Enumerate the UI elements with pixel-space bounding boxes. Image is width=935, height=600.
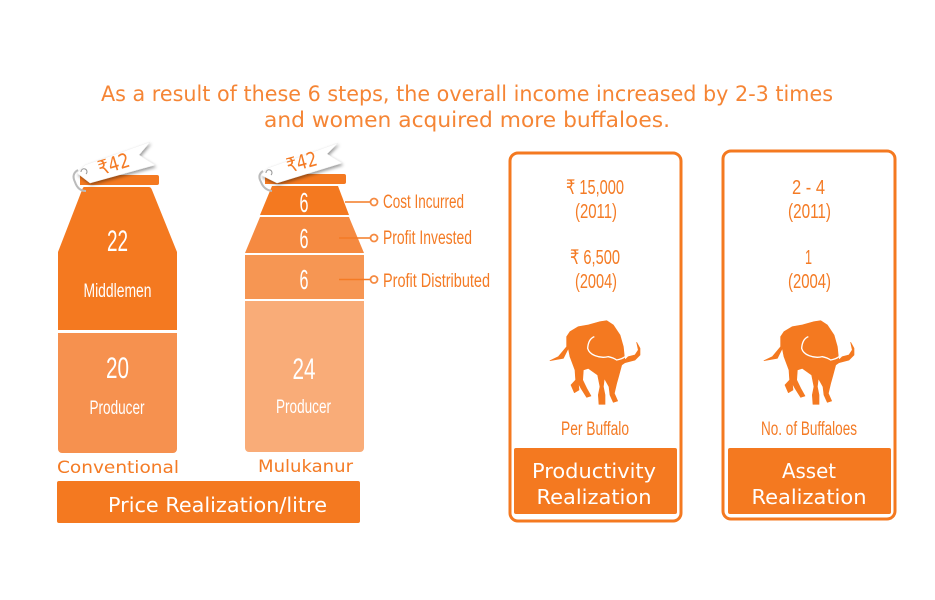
segment: producer: 20 (106, 352, 129, 385)
value: 2011 income: ₹ 15,000 (566, 177, 624, 199)
value: 2011 income (566, 177, 624, 223)
segment: profit invested: 6 (300, 223, 308, 254)
segment: profit distributed (245, 255, 364, 299)
title (101, 82, 833, 132)
label: per buffalo: Per Buffalo (561, 419, 629, 440)
title: As a result of these 6 steps, the overall income increased by 2-3 times (101, 82, 833, 106)
value: 2011 buffaloes: 2 - 4 (792, 177, 825, 199)
callout: profit invested: Profit Invested (383, 228, 472, 249)
bottle cap (265, 174, 346, 184)
value: 2011 buffaloes: (2011) (788, 201, 831, 223)
segment: cost incurred (260, 186, 349, 218)
segment: producer: 24 (292, 353, 316, 386)
panel: asset realization (723, 151, 895, 519)
panel: productivity realization (510, 153, 681, 521)
banner: asset realization (728, 448, 891, 514)
segment: producer (58, 333, 177, 453)
label: mulukanur: Mulukanur (258, 457, 353, 477)
price tag: mulukanur (259, 143, 342, 191)
segment: middlemen: 22 (107, 225, 128, 258)
value: 2004 income (570, 247, 620, 293)
banner: asset realization: Realization (752, 485, 866, 509)
banner: price realization (57, 481, 360, 523)
label: conventional: Conventional (57, 458, 179, 478)
value: 2004 buffaloes: 1 (805, 247, 812, 269)
banner: asset realization: Asset (782, 459, 836, 483)
segment: producer (245, 301, 364, 452)
value: 2011 buffaloes (788, 177, 831, 223)
bottle: conventional (58, 175, 177, 453)
callout: cost incurred: Cost Incurred (383, 192, 464, 213)
segment: middlemen (58, 187, 177, 330)
icon: buffalo (764, 321, 854, 404)
bottle: mulukanur (245, 174, 364, 452)
callout: profit distributed: Profit Distributed (383, 271, 490, 292)
callout: profit distributed (339, 271, 490, 292)
price tag: conventional: ₹42 (95, 148, 133, 180)
value: 2004 buffaloes (788, 247, 831, 293)
bottle cap (80, 175, 159, 185)
value: 2004 income: (2004) (575, 271, 617, 293)
segment: profit invested (245, 217, 364, 254)
banner: productivity realization: Realization (536, 485, 652, 509)
banner: productivity realization: Productivity (532, 459, 656, 483)
banner: productivity realization (514, 448, 677, 514)
segment: middlemen: Middlemen (84, 281, 152, 302)
value: 2004 income: ₹ 6,500 (570, 247, 620, 269)
value: 2004 buffaloes: (2004) (788, 271, 831, 293)
segment: profit distributed: 6 (300, 264, 308, 295)
label: no. of buffaloes: No. of Buffaloes (761, 419, 857, 440)
price tag: conventional (74, 142, 155, 191)
title: and women acquired more buffaloes. (264, 108, 670, 132)
segment: cost incurred: 6 (300, 187, 308, 218)
segment: producer: Producer (90, 398, 145, 419)
callout: cost incurred (345, 192, 464, 213)
icon: buffalo (550, 321, 640, 404)
value: 2011 income: (2011) (575, 201, 617, 223)
price tag: mulukanur: ₹42 (284, 146, 320, 178)
banner: price realization: Price Realization/litre (108, 493, 327, 517)
segment: producer: Producer (276, 397, 331, 418)
callout: profit invested (339, 228, 472, 249)
